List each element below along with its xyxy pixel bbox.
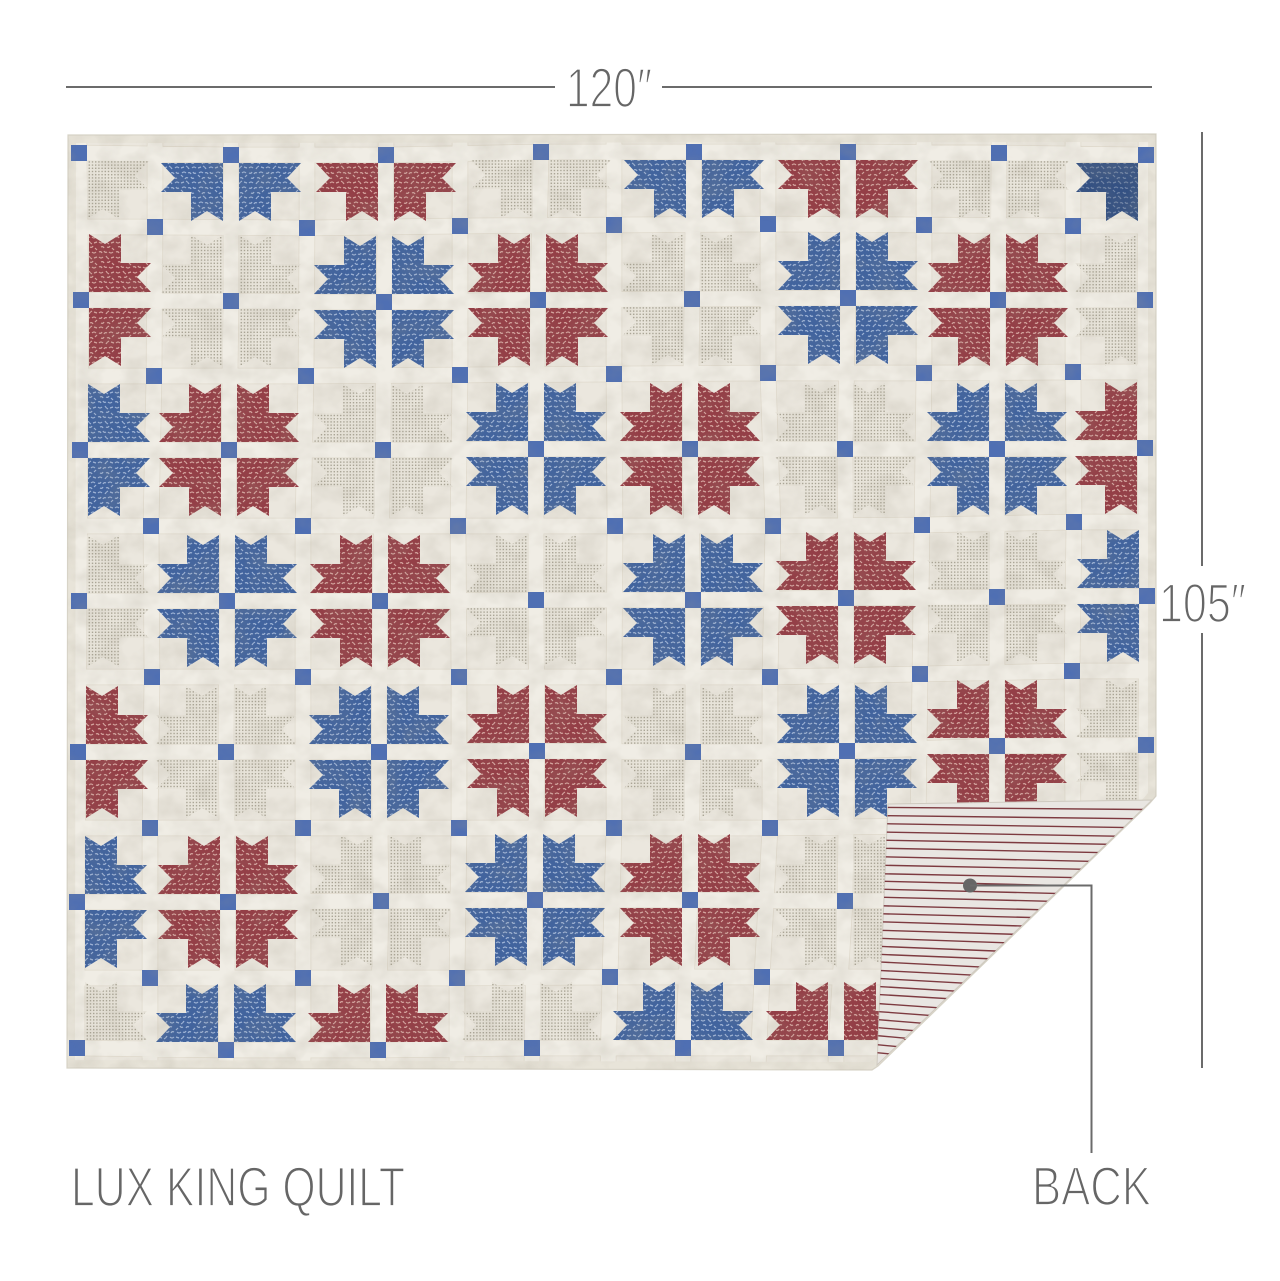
blue cornerstone squares — [69, 144, 1155, 1058]
red stars — [86, 160, 1137, 1042]
width label: 120″ — [566, 56, 652, 119]
red pinstripes — [878, 806, 1143, 1054]
width dimension line — [66, 86, 1152, 88]
sashing strips clipped to quilt — [68, 136, 1156, 1068]
folded corner showing striped back — [870, 800, 1155, 1080]
quilt base fabric — [67, 134, 1156, 1070]
dotted gray stars — [85, 160, 1138, 1040]
shaded top-right blue quarter — [1076, 163, 1138, 221]
height label: 105″ — [1159, 572, 1246, 634]
back fabric — [877, 800, 1152, 1065]
quilt outer edge — [67, 134, 1156, 1070]
quilt front — [60, 130, 1160, 1075]
blue stars — [85, 160, 1139, 1042]
back callout leader with dot — [963, 878, 1092, 1153]
outer border strip — [67, 134, 1156, 1070]
fabric wrinkle shading — [60, 130, 1160, 1075]
product name label: LUX KING QUILT — [71, 1155, 405, 1218]
height dimension line — [1201, 132, 1203, 1068]
back label: BACK — [1032, 1155, 1151, 1217]
